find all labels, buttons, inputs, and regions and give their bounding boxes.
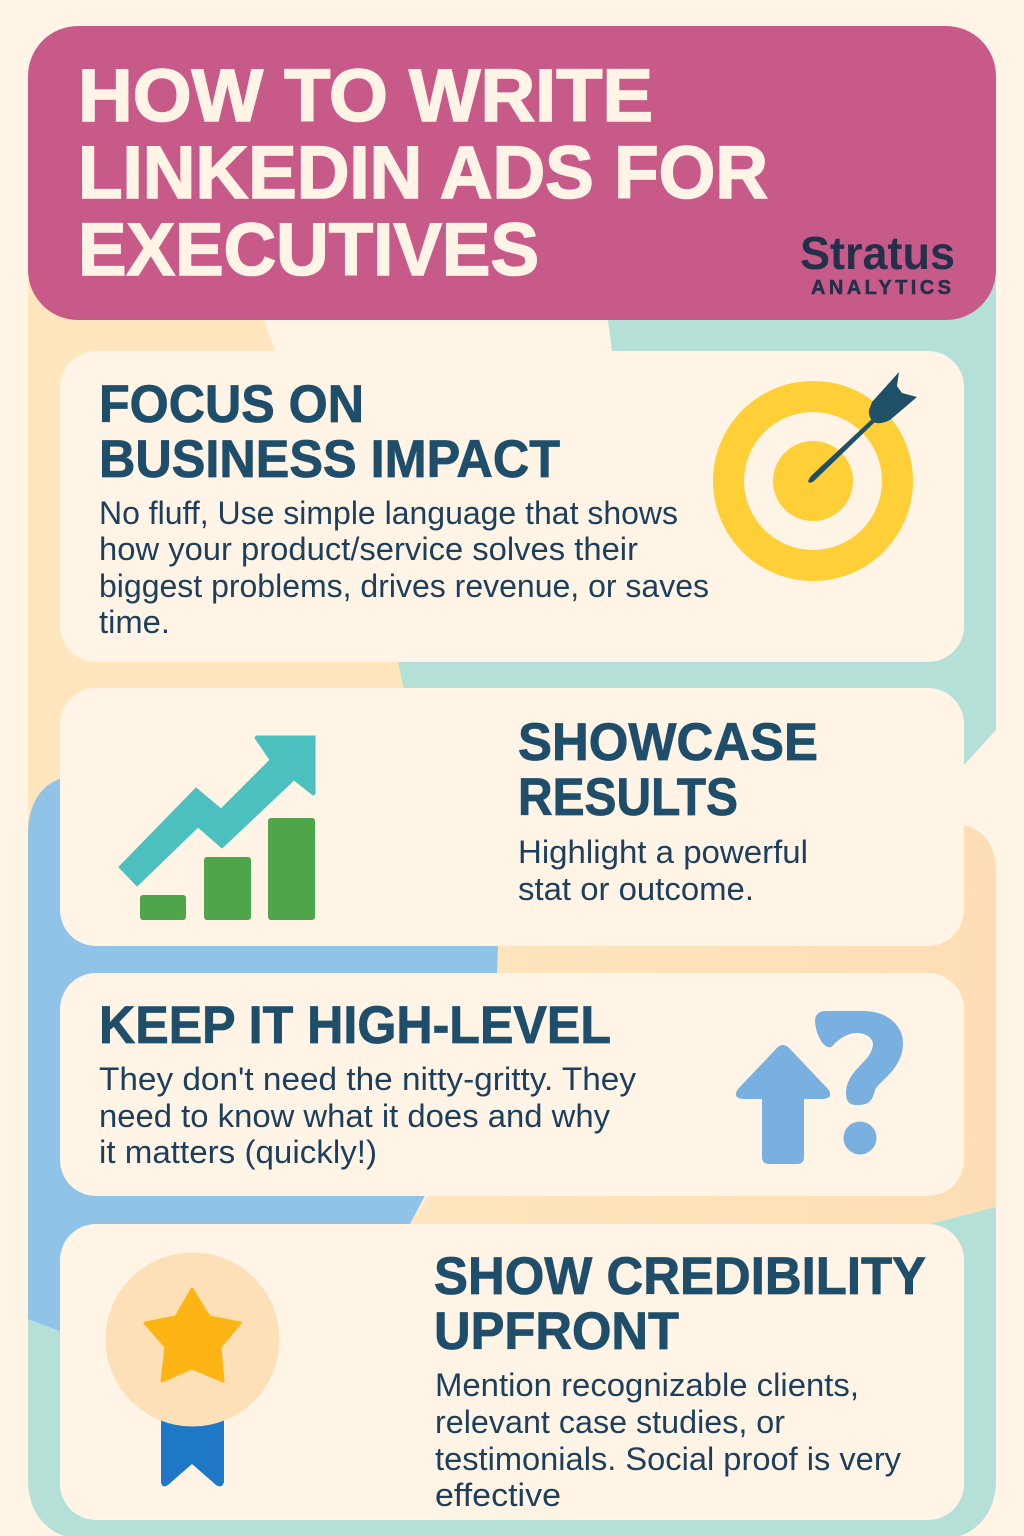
header banner (28, 26, 996, 320)
icon: up arrow and question mark (736, 1011, 903, 1164)
heading: SHOWCASE (518, 713, 818, 772)
heading: RESULTS (518, 768, 738, 827)
heading: KEEP IT HIGH-LEVEL (99, 996, 611, 1055)
icon: growth chart with arrow (119, 736, 315, 920)
heading (434, 1247, 926, 1361)
title: EXECUTIVES (78, 208, 539, 291)
body text: effective (435, 1477, 561, 1513)
title: LINKEDIN ADS FOR (78, 131, 768, 214)
heading: SHOW CREDIBILITY (434, 1247, 926, 1306)
background shape: mint bottom (28, 1207, 996, 1536)
title (78, 54, 768, 291)
panel: showcase results (60, 688, 964, 946)
body text: Highlight a powerful (518, 834, 808, 870)
body text (99, 495, 709, 640)
body text (99, 1061, 636, 1170)
body text: how your product/service solves their (99, 531, 638, 567)
body text (518, 834, 808, 907)
body text: biggest problems, drives revenue, or saves (99, 568, 709, 604)
body text: stat or outcome. (518, 871, 754, 907)
body text: need to know what it does and why (99, 1098, 610, 1134)
icon: award medal with star (106, 1252, 280, 1486)
body text (435, 1367, 901, 1513)
panel: keep it high-level (60, 973, 964, 1196)
body text: relevant case studies, or (435, 1404, 785, 1440)
body text: No fluff, Use simple language that shows (99, 495, 678, 531)
body text: it matters (quickly!) (99, 1134, 377, 1170)
heading (99, 375, 560, 489)
heading: FOCUS ON (99, 375, 364, 434)
body text: testimonials. Social proof is very (435, 1441, 901, 1477)
heading: BUSINESS IMPACT (99, 430, 560, 489)
title: HOW TO WRITE (78, 54, 653, 137)
background shape: orange right (410, 825, 996, 1224)
logo: Stratus Analytics: Stratus (800, 227, 955, 279)
background shape: blue left (28, 778, 499, 1340)
heading (518, 713, 818, 827)
heading: UPFRONT (434, 1302, 679, 1361)
panel: focus on business impact (60, 351, 964, 662)
panel: show credibility upfront (60, 1224, 964, 1520)
background shape: yellow upper left (28, 280, 520, 830)
logo: Stratus Analytics: ANALYTICS (811, 277, 951, 299)
body text: They don't need the nitty-gritty. They (99, 1061, 636, 1097)
icon: target with dart (713, 372, 917, 581)
body text: Mention recognizable clients, (435, 1367, 859, 1403)
body text: time. (99, 604, 170, 640)
background shape: teal upper right (398, 280, 996, 765)
